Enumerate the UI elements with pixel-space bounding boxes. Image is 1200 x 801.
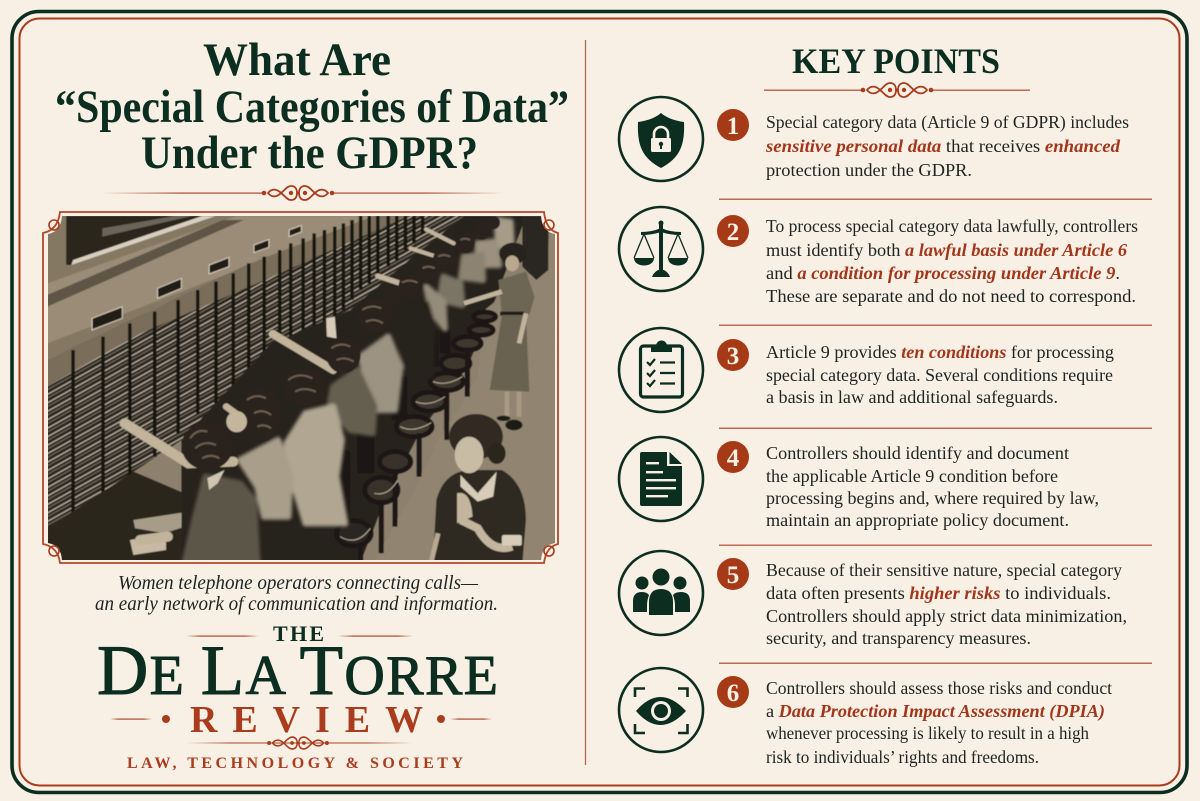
badge 4 <box>717 441 749 473</box>
standing supervisor <box>464 243 535 430</box>
badge 5 <box>717 558 749 590</box>
operators: heads <box>182 216 500 470</box>
point 2 <box>619 207 1138 306</box>
text 4: Controllers should identify and document <box>766 443 1069 463</box>
caption <box>95 572 498 615</box>
text 5: Controllers should apply strict data minimization, <box>766 606 1127 626</box>
seated operators: bodies <box>185 220 511 562</box>
logo: The De La Torre Review: DE LA TORRE <box>97 632 498 710</box>
logo: The De La Torre Review <box>97 621 498 772</box>
icon: checklist clipboard <box>619 328 703 412</box>
photo: telephone operators <box>43 212 558 563</box>
text 4: maintain an appropriate policy document. <box>766 510 1069 530</box>
icon: eye <box>619 668 703 752</box>
column divider <box>584 40 586 765</box>
wood wall <box>48 216 230 358</box>
floor patch <box>374 216 557 562</box>
text 1: Special category data (Article 9 of GDPR) includes <box>766 112 1129 132</box>
text 5: security, and transparency measures. <box>766 628 1031 648</box>
text 3: a basis in law and additional safeguards. <box>766 387 1058 407</box>
paper on desk <box>326 317 337 338</box>
badge 2: 2 <box>727 219 739 246</box>
text 5: Because of their sensitive nature, special category <box>766 560 1122 580</box>
text 1: protection under the GDPR. <box>766 160 972 180</box>
foreground operator <box>431 414 526 562</box>
point 1 <box>619 97 1129 181</box>
text 1 <box>765 112 1129 180</box>
dark aisle under operators <box>182 216 526 562</box>
title: What Are <box>203 34 391 86</box>
badge 3: 3 <box>727 343 739 370</box>
text 5 <box>766 560 1127 648</box>
badge 5: 5 <box>727 562 739 589</box>
text 2: must identify both a lawful basis under Article 6 <box>766 240 1127 260</box>
label plates <box>92 225 301 330</box>
text 6: risk to individuals’ rights and freedoms. <box>766 747 1039 767</box>
text 2: These are separate and do not need to correspond. <box>766 286 1136 306</box>
text 5: data often presents higher risks to individuals. <box>766 583 1111 603</box>
point 5 <box>619 551 1127 648</box>
logo: The De La Torre Review: LAW, TECHNOLOGY & SOCIETY <box>127 755 463 772</box>
photo frame <box>43 212 558 563</box>
stools <box>337 312 496 562</box>
text 4: the applicable Article 9 condition before <box>766 466 1058 486</box>
text 1: sensitive personal data that receives enhanced <box>765 136 1120 156</box>
point 6 <box>619 668 1112 767</box>
text 3: special category data. Several conditions require <box>766 365 1113 385</box>
text 2 <box>766 216 1138 306</box>
icon: document <box>619 437 703 521</box>
text 6 <box>766 678 1112 767</box>
text 2: To process special category data lawfully, controllers <box>766 216 1138 236</box>
logo: The De La Torre Review: THE <box>273 621 324 646</box>
text 4 <box>766 443 1099 530</box>
dividers <box>719 198 1152 664</box>
badge 6 <box>717 676 749 708</box>
logo: The De La Torre Review: REVIEW <box>190 699 423 741</box>
key points heading: KEY POINTS <box>792 41 1000 81</box>
text 6: whenever processing is likely to result in a high <box>766 723 1089 743</box>
badge 4: 4 <box>727 445 740 472</box>
title: Under the GDPR? <box>141 127 478 179</box>
badge 1 <box>717 109 749 141</box>
title: “Special Categories of Data” <box>55 81 569 133</box>
text 6: Controllers should assess those risks and conduct <box>766 678 1112 698</box>
text 3 <box>766 342 1114 407</box>
text 3: Article 9 provides ten conditions for processing <box>766 342 1114 362</box>
icon: shield with lock <box>619 97 703 181</box>
text 2: and a condition for processing under Article 9 . <box>766 263 1120 283</box>
text 6: a Data Protection Impact Assessment (DPIA) <box>766 701 1105 721</box>
jack panels <box>47 216 464 528</box>
text 4: processing begins and, where required by law, <box>766 488 1099 508</box>
badge 1: 1 <box>727 113 739 140</box>
key points ornament <box>764 83 1030 97</box>
photo corner flourishes <box>49 220 554 556</box>
chair backs <box>341 314 450 518</box>
icon: scales <box>619 207 703 291</box>
operators: arms <box>125 229 454 540</box>
icon: people <box>619 551 703 635</box>
point 4 <box>619 437 1099 530</box>
caption: an early network of communication and information. <box>95 593 498 615</box>
point 3 <box>619 328 1114 412</box>
desk <box>48 471 182 560</box>
caption: Women telephone operators connecting calls— <box>118 572 478 594</box>
title ornament <box>102 186 504 200</box>
badge 3 <box>717 339 749 371</box>
title <box>55 34 569 179</box>
badge 2 <box>717 215 749 247</box>
badge 6: 6 <box>727 680 739 707</box>
hair curls <box>190 239 470 458</box>
